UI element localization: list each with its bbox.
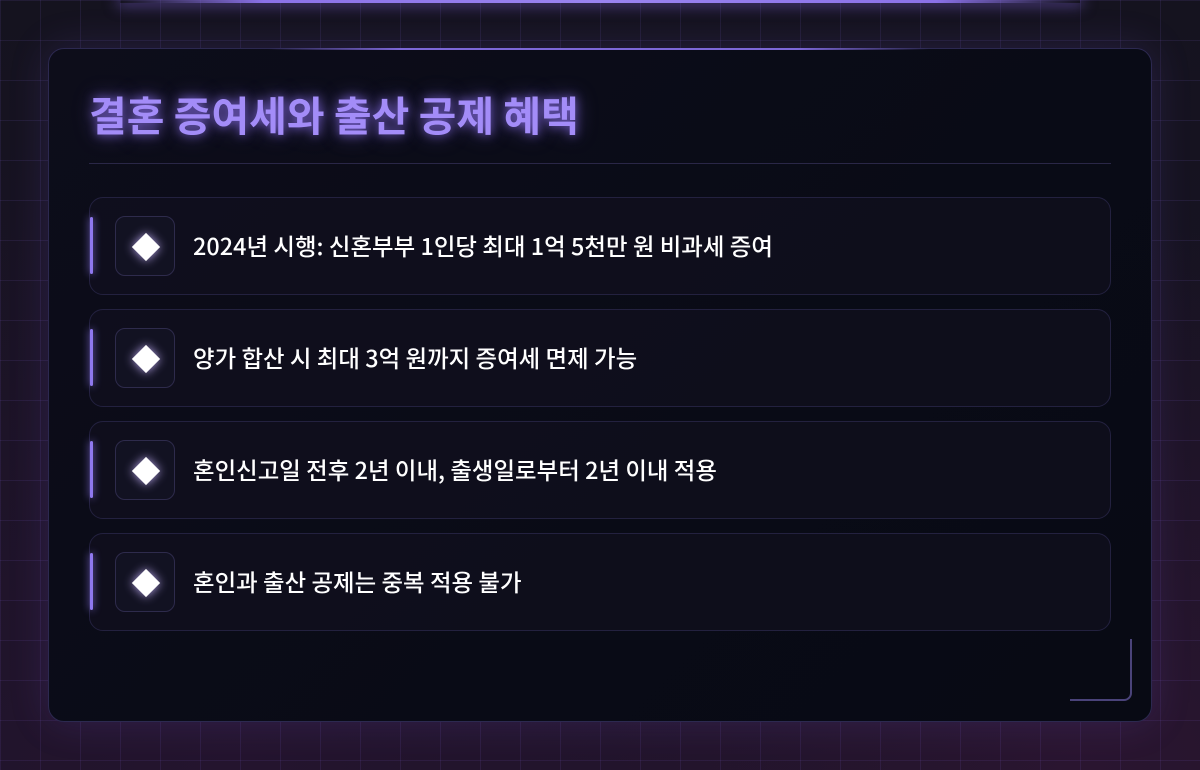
- corner decoration: [1070, 639, 1132, 701]
- item 1: [89, 197, 1111, 295]
- text 3: 혼인신고일 전후 2년 이내, 출생일로부터 2년 이내 적용: [193, 452, 717, 486]
- icon: diamond: [115, 552, 175, 612]
- item 4: [89, 533, 1111, 631]
- icon: diamond: [115, 328, 175, 388]
- text 4: 혼인과 출산 공제는 중복 적용 불가: [193, 564, 522, 598]
- text 1: 2024년 시행: 신혼부부 1인당 최대 1억 5천만 원 비과세 증여: [193, 228, 773, 262]
- item 2: [89, 309, 1111, 407]
- icon: diamond: [115, 440, 175, 500]
- title: 결혼 증여세와 출산 공제 혜택: [89, 83, 579, 143]
- icon: diamond: [115, 216, 175, 276]
- text 2: 양가 합산 시 최대 3억 원까지 증여세 면제 가능: [193, 340, 637, 374]
- top glow line: [120, 0, 1080, 3]
- item 3: [89, 421, 1111, 519]
